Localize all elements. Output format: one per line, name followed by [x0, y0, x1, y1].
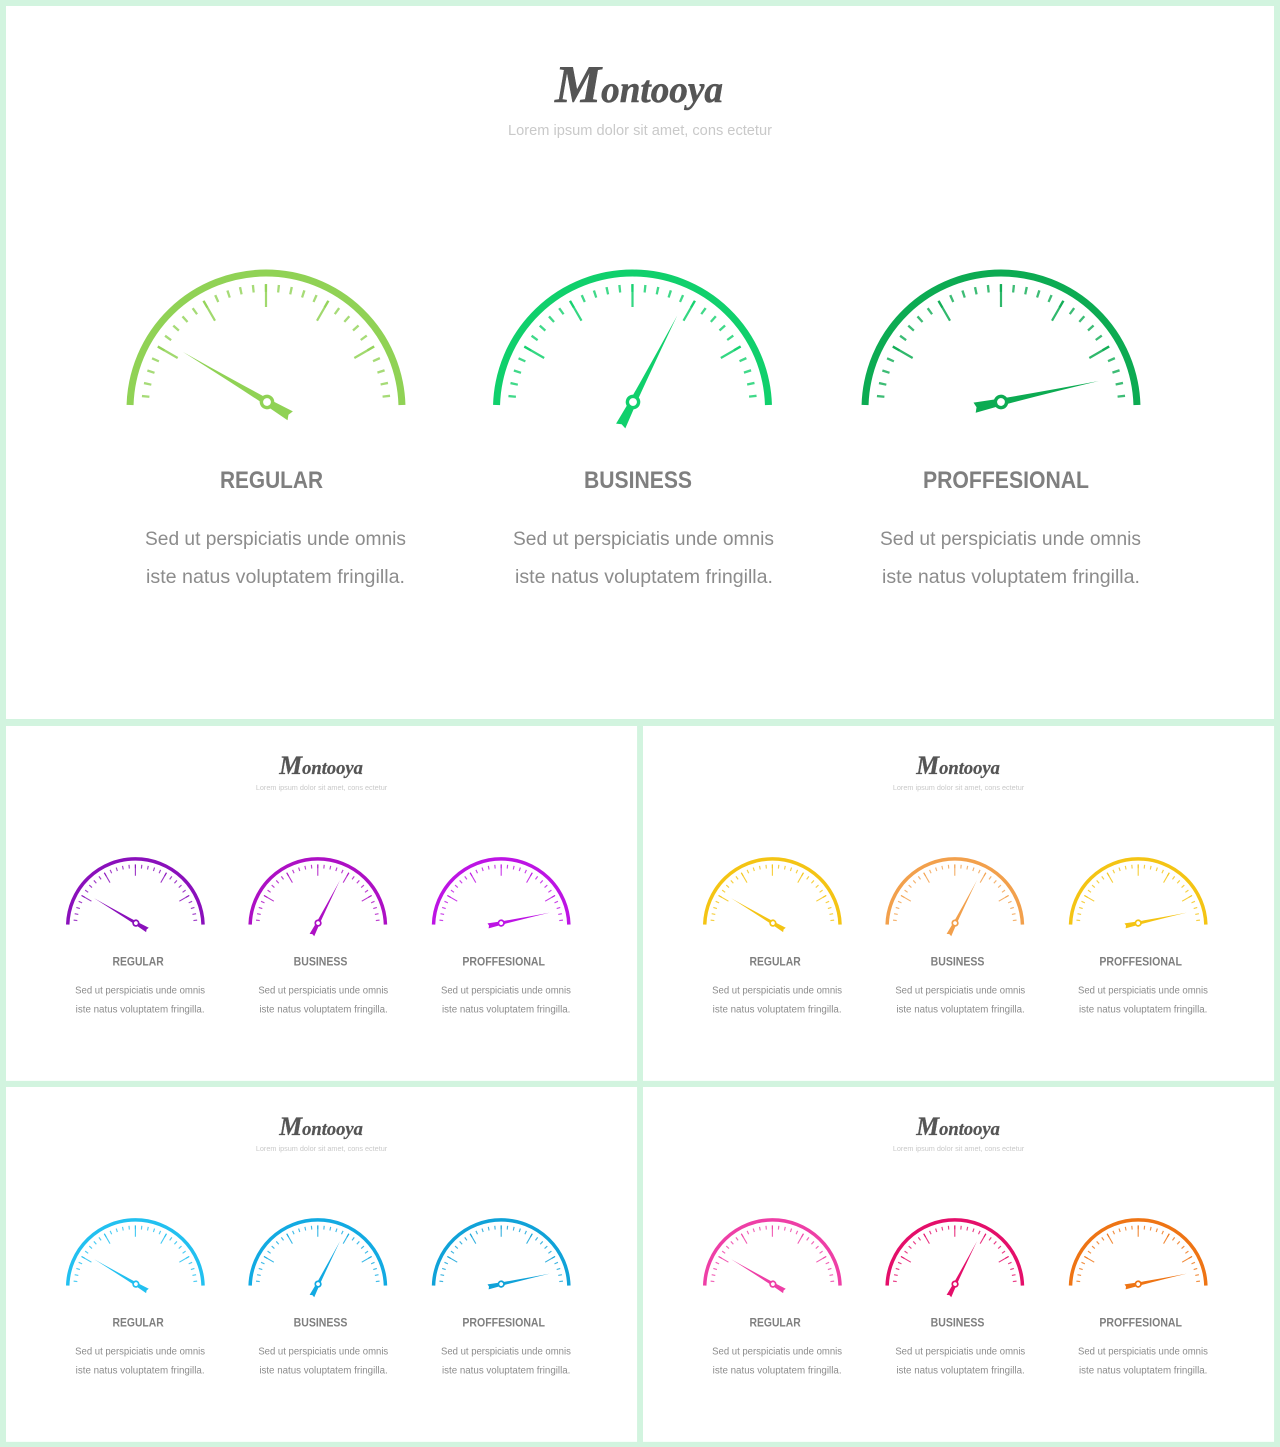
- gauge: proffesional: [1071, 859, 1206, 929]
- label: proffesional: PROFFESIONAL: [923, 467, 1089, 494]
- gauge: business: [887, 1220, 1022, 1297]
- text: business: iste natus voluptatem fringilla.: [896, 1366, 1025, 1377]
- text: business: Sed ut perspiciatis unde omnis: [513, 528, 774, 550]
- text: business: Sed ut perspiciatis unde omnis: [895, 986, 1025, 997]
- text: proffesional: iste natus voluptatem fringilla.: [1079, 1366, 1207, 1377]
- title: Montooya: [554, 56, 723, 114]
- text: regular: [712, 986, 842, 1016]
- subtitle: Lorem ipsum dolor sit amet, cons ectetur: [508, 123, 772, 139]
- label: proffesional: PROFFESIONAL: [1099, 954, 1182, 968]
- text: business: iste natus voluptatem fringilla.: [515, 566, 773, 588]
- text: regular: iste natus voluptatem fringilla.: [76, 1005, 205, 1016]
- text: proffesional: Sed ut perspiciatis unde omnis: [441, 986, 571, 997]
- label: regular: REGULAR: [220, 467, 323, 494]
- text: regular: iste natus voluptatem fringilla.: [713, 1366, 842, 1377]
- text: proffesional: [1078, 986, 1208, 1016]
- label: regular: REGULAR: [112, 1315, 164, 1329]
- text: proffesional: Sed ut perspiciatis unde omnis: [1078, 986, 1208, 997]
- label: proffesional: PROFFESIONAL: [462, 1315, 545, 1329]
- text: proffesional: [441, 1347, 571, 1377]
- text: regular: Sed ut perspiciatis unde omnis: [145, 528, 406, 550]
- gauge: regular: [130, 273, 402, 421]
- gauge: proffesional: [1071, 1220, 1206, 1290]
- text: proffesional: [441, 986, 571, 1016]
- gauge: business: [250, 859, 385, 936]
- text: regular: [712, 1347, 842, 1377]
- text: business: iste natus voluptatem fringilla.: [896, 1005, 1025, 1016]
- text: proffesional: iste natus voluptatem fringilla.: [442, 1005, 570, 1016]
- text: regular: Sed ut perspiciatis unde omnis: [75, 1347, 205, 1358]
- text: regular: [75, 986, 205, 1016]
- title: Montooya: [278, 751, 363, 780]
- text: regular: Sed ut perspiciatis unde omnis: [712, 986, 842, 997]
- gauge: regular: [68, 859, 203, 932]
- gauge: regular: [705, 1220, 840, 1293]
- label: business: BUSINESS: [294, 954, 347, 968]
- subtitle: Lorem ipsum dolor sit amet, cons ectetur: [893, 783, 1025, 792]
- gauge: business: [250, 1220, 385, 1297]
- title: Montooya: [915, 1112, 1000, 1141]
- gauge: business: [497, 273, 768, 429]
- text: proffesional: [880, 528, 1141, 588]
- text: business: [895, 1347, 1025, 1377]
- gauge: business: [887, 859, 1022, 936]
- text: regular: Sed ut perspiciatis unde omnis: [75, 986, 205, 997]
- text: regular: [75, 1347, 205, 1377]
- panel: purple slide: [6, 726, 637, 1081]
- subtitle: Lorem ipsum dolor sit amet, cons ectetur: [256, 783, 388, 792]
- label: business: BUSINESS: [931, 1315, 984, 1329]
- gauge: regular: [705, 859, 840, 932]
- panel: main green slide: [6, 6, 1274, 719]
- text: regular: iste natus voluptatem fringilla.: [146, 566, 405, 588]
- text: proffesional: Sed ut perspiciatis unde omnis: [441, 1347, 571, 1358]
- text: proffesional: Sed ut perspiciatis unde omnis: [1078, 1347, 1208, 1358]
- panel: yellow slide: [643, 726, 1274, 1081]
- text: proffesional: iste natus voluptatem fringilla.: [882, 566, 1140, 588]
- text: proffesional: iste natus voluptatem fringilla.: [1079, 1005, 1207, 1016]
- label: regular: REGULAR: [112, 954, 164, 968]
- text: business: [258, 986, 388, 1016]
- label: business: BUSINESS: [931, 954, 984, 968]
- title: Montooya: [915, 751, 1000, 780]
- text: proffesional: Sed ut perspiciatis unde omnis: [880, 528, 1141, 550]
- subtitle: Lorem ipsum dolor sit amet, cons ectetur: [893, 1144, 1025, 1153]
- text: regular: iste natus voluptatem fringilla.: [713, 1005, 842, 1016]
- text: regular: iste natus voluptatem fringilla.: [76, 1366, 205, 1377]
- label: business: BUSINESS: [584, 467, 692, 494]
- text: business: Sed ut perspiciatis unde omnis: [895, 1347, 1025, 1358]
- label: proffesional: PROFFESIONAL: [462, 954, 545, 968]
- title: Montooya: [278, 1112, 363, 1141]
- text: business: iste natus voluptatem fringilla.: [259, 1005, 388, 1016]
- label: proffesional: PROFFESIONAL: [1099, 1315, 1182, 1329]
- label: regular: REGULAR: [749, 954, 801, 968]
- text: regular: Sed ut perspiciatis unde omnis: [712, 1347, 842, 1358]
- text: business: Sed ut perspiciatis unde omnis: [258, 1347, 388, 1358]
- subtitle: Lorem ipsum dolor sit amet, cons ectetur: [256, 1144, 388, 1153]
- gauge: proffesional: [865, 273, 1137, 413]
- text: proffesional: iste natus voluptatem fringilla.: [442, 1366, 570, 1377]
- label: business: BUSINESS: [294, 1315, 347, 1329]
- text: business: iste natus voluptatem fringilla.: [259, 1366, 388, 1377]
- gauge: proffesional: [434, 859, 569, 929]
- panel: pink and orange slide: [643, 1087, 1274, 1442]
- gauge: proffesional: [434, 1220, 569, 1290]
- text: business: Sed ut perspiciatis unde omnis: [258, 986, 388, 997]
- label: regular: REGULAR: [749, 1315, 801, 1329]
- text: business: [258, 1347, 388, 1377]
- text: business: [895, 986, 1025, 1016]
- text: business: [513, 528, 774, 588]
- text: proffesional: [1078, 1347, 1208, 1377]
- panel: blue slide: [6, 1087, 637, 1442]
- text: regular: [145, 528, 406, 588]
- gauge: regular: [68, 1220, 203, 1293]
